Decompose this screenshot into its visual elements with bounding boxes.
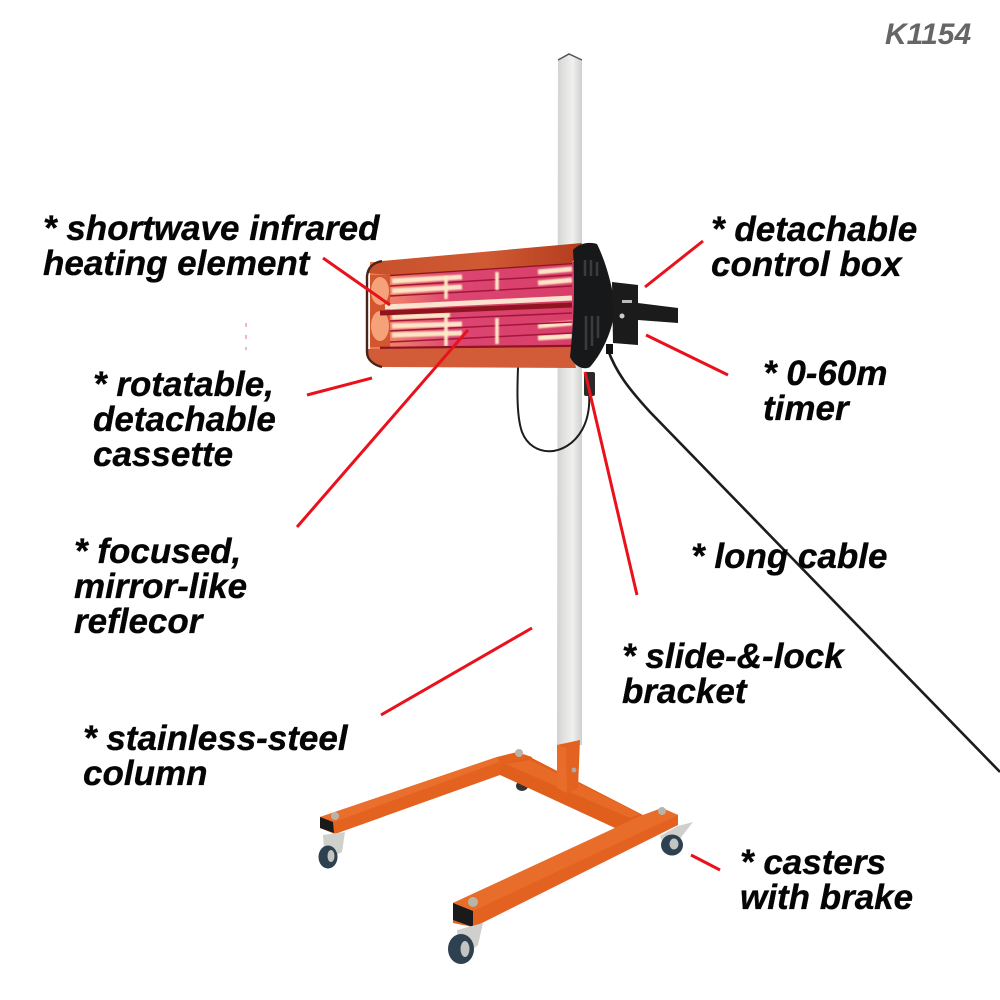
- label: timer: * 0-60m: [763, 354, 888, 393]
- label: rotatable, detachable cassette: detachable: [93, 400, 276, 439]
- label: slide-and-lock bracket: * slide-&-lock: [622, 637, 845, 676]
- stainless-steel column: [557, 54, 582, 745]
- left rim: [367, 261, 382, 367]
- lamp cassette: [367, 243, 615, 368]
- label: casters with brake: * casters: [740, 843, 886, 882]
- caster: left front: [318, 832, 345, 868]
- label: detachable control box: control box: [711, 245, 903, 284]
- label: casters with brake: with brake: [740, 878, 913, 917]
- heating chamber: [370, 262, 574, 349]
- label: rotatable, detachable cassette: cassette: [93, 435, 233, 474]
- label: timer: timer: [763, 389, 851, 428]
- left arm: [320, 749, 532, 834]
- back caster: [516, 781, 528, 791]
- cross bar: [500, 757, 643, 828]
- caster: right rear with brake: [660, 822, 693, 856]
- caster: right front: [448, 923, 483, 964]
- long power cable: [608, 350, 1000, 772]
- bottom housing panel: [368, 347, 576, 368]
- label: long cable: * long cable: [691, 537, 887, 576]
- coiled lamp cable: [517, 345, 589, 451]
- label: shortwave infrared heating element: heating element: [43, 244, 311, 283]
- product code: K1154: [885, 18, 971, 51]
- label: rotatable, detachable cassette: * rotatable,: [93, 365, 274, 404]
- label: focused, mirror-like reflector: mirror-like: [74, 567, 247, 606]
- upright socket: [557, 740, 580, 793]
- label: detachable control box: * detachable: [711, 210, 917, 249]
- callout lines: [246, 241, 728, 870]
- label: stainless-steel column: * stainless-steel: [83, 719, 349, 758]
- slide-and-lock bracket: [584, 372, 595, 396]
- orange base: [318, 740, 693, 964]
- right arm: [453, 807, 678, 927]
- label: shortwave infrared heating element: * shortwave infrared: [43, 209, 380, 248]
- control box: [606, 282, 678, 354]
- label: stainless-steel column: column: [83, 754, 207, 793]
- black end cap: [570, 243, 615, 368]
- top housing panel: [368, 243, 582, 275]
- label: focused, mirror-like reflector: * focused,: [74, 532, 241, 571]
- label: focused, mirror-like reflector: reflecor: [74, 602, 205, 641]
- label: slide-and-lock bracket: bracket: [622, 672, 748, 711]
